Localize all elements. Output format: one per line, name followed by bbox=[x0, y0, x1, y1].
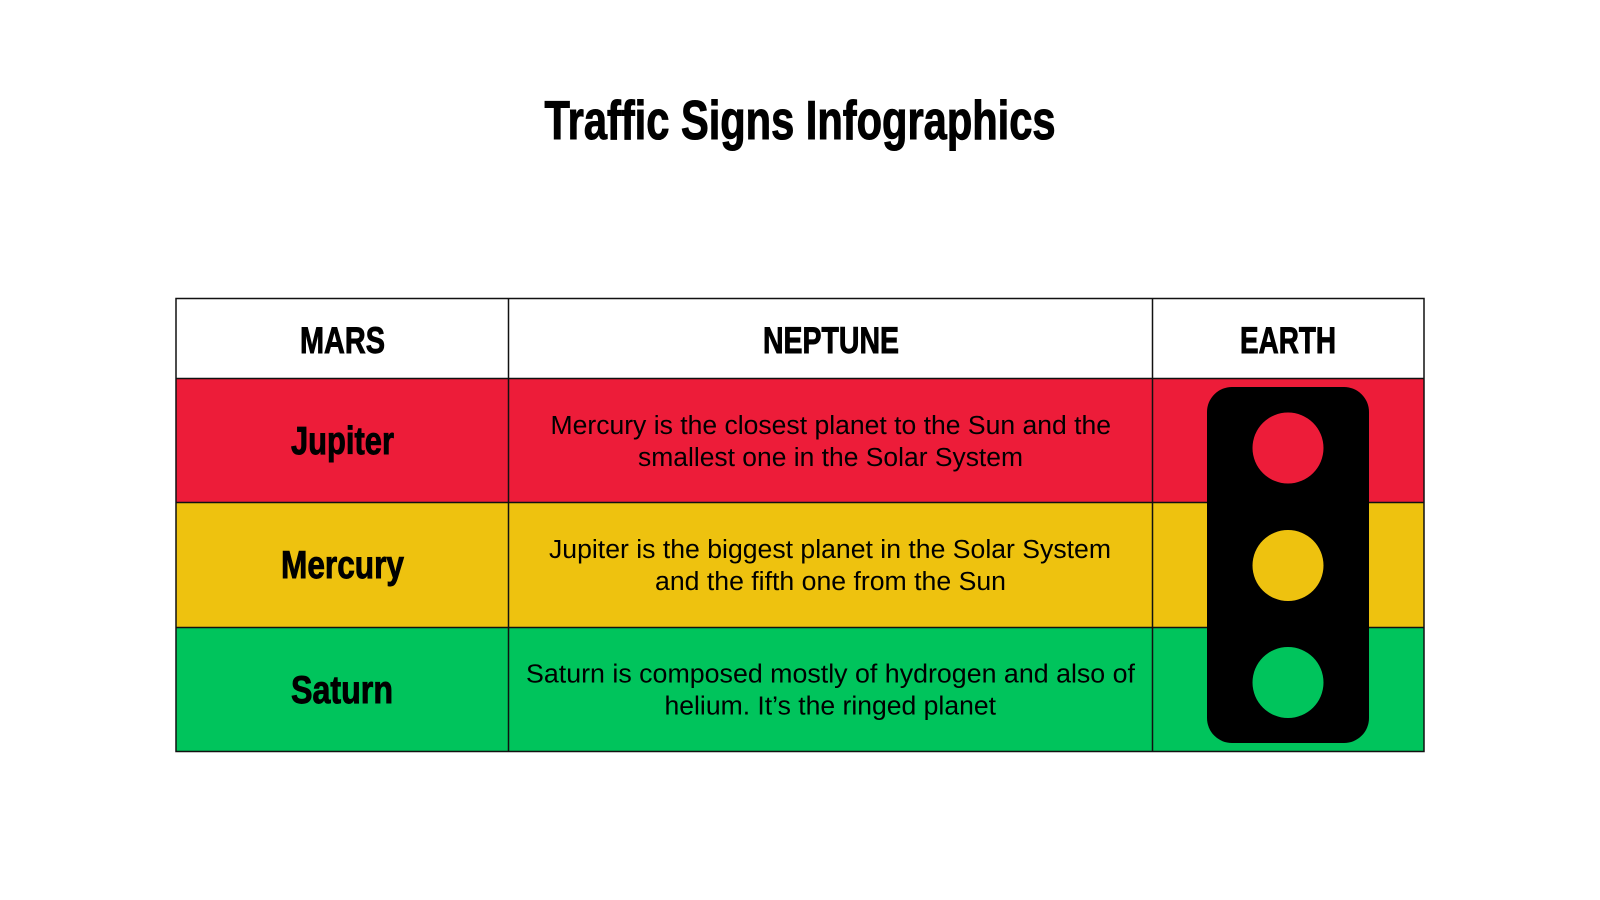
label: Saturn: Saturn bbox=[291, 669, 393, 712]
table bbox=[176, 298, 1424, 752]
description: Mercury: smallest one in the Solar System bbox=[638, 444, 1023, 472]
red light bbox=[1252, 412, 1324, 484]
label: Mercury: Mercury bbox=[281, 544, 404, 587]
icon: traffic light bbox=[1207, 387, 1369, 743]
description: Jupiter bbox=[549, 536, 1111, 596]
header: Earth: EARTH bbox=[1240, 320, 1336, 361]
header row bbox=[176, 298, 1424, 378]
yellow light bbox=[1252, 530, 1324, 601]
description: Jupiter: and the fifth one from the Sun bbox=[655, 568, 1006, 596]
description: Saturn: helium. It’s the ringed planet bbox=[664, 692, 996, 720]
green light bbox=[1252, 647, 1324, 718]
description: Mercury: Mercury is the closest planet to the Sun and the bbox=[550, 412, 1111, 440]
header: Neptune: NEPTUNE bbox=[763, 320, 899, 361]
header: Mars: MARS bbox=[300, 320, 385, 361]
row: red bbox=[176, 378, 1424, 502]
description: Jupiter: Jupiter is the biggest planet in the Solar System bbox=[549, 536, 1111, 564]
description: Saturn bbox=[526, 660, 1136, 720]
title: Traffic Signs Infographics bbox=[544, 89, 1056, 151]
row: yellow bbox=[176, 502, 1424, 627]
label: Jupiter: Jupiter bbox=[291, 420, 394, 463]
description: Mercury bbox=[550, 412, 1111, 472]
row: green bbox=[176, 627, 1424, 751]
description: Saturn: Saturn is composed mostly of hydrogen and also of bbox=[526, 660, 1136, 688]
